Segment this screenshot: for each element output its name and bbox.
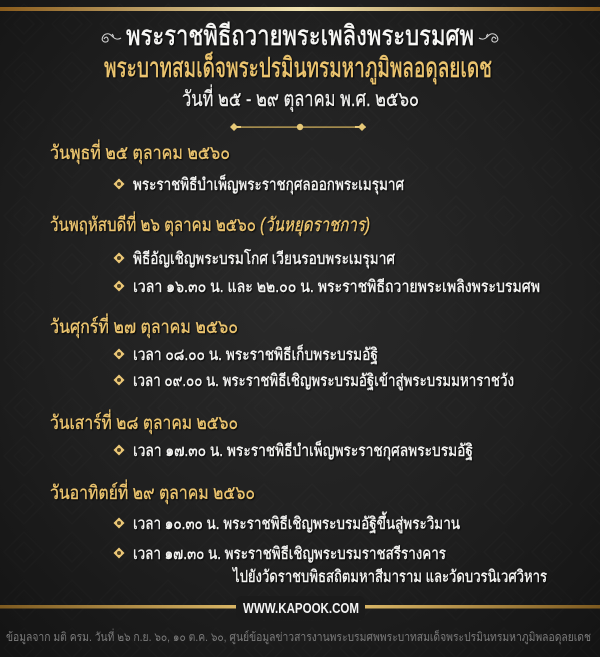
bullet (114, 518, 124, 528)
day heading: วันอาทิตย์ที่ ๒๙ ตุลาคม ๒๕๖๐ (50, 479, 255, 505)
date line: วันที่ ๒๕ - ๒๙ ตุลาคม พ.ศ. ๒๕๖๐ (182, 84, 419, 112)
item: เวลา ๑๐.๓๐ น. พระราชพิธีเชิญพระบรมอัฐิขึ้นสู่พระวิมาน (133, 511, 460, 534)
header block (102, 20, 498, 112)
item: พระราชพิธีบำเพ็ญพระราชกุศลออกพระเมรุมาศ (133, 174, 404, 195)
section: 26 October (50, 211, 540, 296)
day heading: วันศุกร์ที่ ๒๗ ตุลาคม ๒๕๖๐ (50, 313, 238, 339)
bullet (114, 444, 124, 456)
icon: left ornament (102, 34, 121, 42)
top gold bar (0, 7, 600, 11)
item: เวลา ๑๖.๓๐ น. และ ๒๒.๐๐ น. พระราชพิธีถวายพระเพลิงพระบรมศพ (133, 278, 540, 296)
section: 25 October (50, 139, 404, 195)
title: พระราชพิธีถวายพระเพลิงพระบรมศพ (126, 20, 474, 51)
bullet (114, 178, 124, 190)
bullet (114, 374, 124, 386)
bullet (114, 548, 124, 558)
website label: WWW.KAPOOK.COM (243, 601, 359, 617)
day heading: วันพฤหัสบดีที่ ๒๖ ตุลาคม ๒๕๖๐ (วันหยุดราชการ) (50, 211, 370, 237)
section: 27 October (50, 313, 514, 391)
item: เวลา ๐๘.๐๐ น. พระราชพิธีเก็บพระบรมอัฐิ (133, 344, 378, 364)
bullet (114, 280, 124, 292)
bullet (114, 252, 124, 264)
item: เวลา ๑๗.๓๐ น. พระราชพิธีเชิญพระบรมราชสรีรางคาร (133, 545, 446, 563)
icon: right ornament (479, 34, 498, 42)
day heading: วันพุธที่ ๒๕ ตุลาคม ๒๕๖๐ (50, 139, 230, 165)
footer band (0, 596, 600, 620)
item: เวลา ๑๗.๓๐ น. พระราชพิธีบำเพ็ญพระราชกุศลพระบรมอัฐิ (133, 440, 473, 461)
divider ornament (230, 123, 366, 131)
section: 28 October (50, 409, 473, 461)
bullet (114, 348, 124, 360)
website badge (236, 596, 365, 620)
item: เวลา ๐๙.๐๐ น. พระราชพิธีเชิญพระบรมอัฐิเข้าสู่พระบรมมหาราชวัง (133, 372, 514, 391)
item: พิธีอัญเชิญพระบรมโกศ เวียนรอบพระเมรุมาศ (133, 249, 395, 269)
day heading: วันเสาร์ที่ ๒๘ ตุลาคม ๒๕๖๐ (50, 409, 238, 435)
section: 29 October (50, 479, 547, 586)
